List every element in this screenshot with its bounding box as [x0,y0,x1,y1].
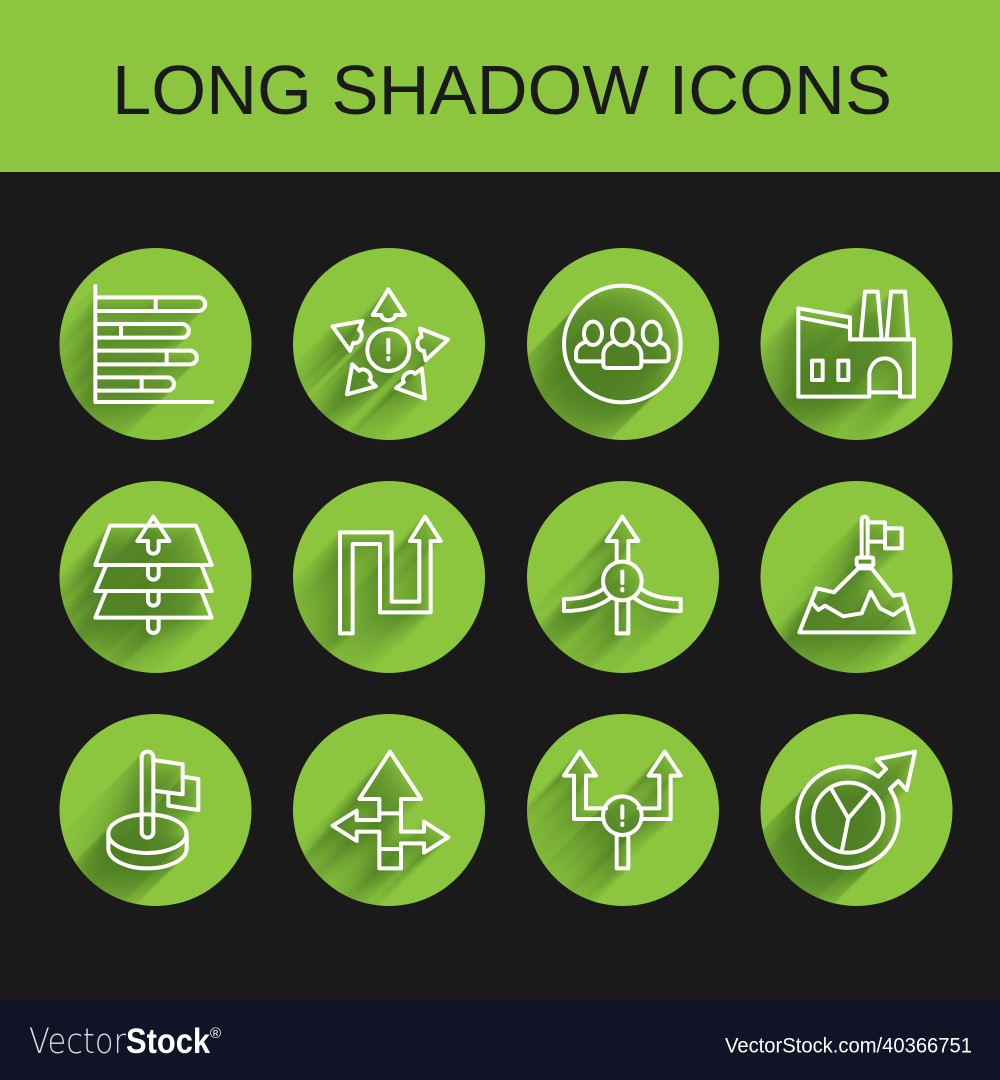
icon: group of people in circle [527,248,719,440]
header banner [0,0,1000,172]
icon: winding path arrow [293,481,485,673]
icon: layers with up arrow [60,481,252,673]
footer bar [0,1000,1000,1080]
footer logo: Stock [126,1022,210,1061]
icon: mountain with flag [760,481,952,673]
icon: flag on round base [60,714,252,906]
icon: pie chart with growth arrow [760,714,952,906]
icon: three-way arrows [293,714,485,906]
icon: horizontal bar chart [60,248,252,440]
icon: road junction with exclamation [527,481,719,673]
icon: factory [760,248,952,440]
icon: forked arrows with exclamation [527,714,719,906]
title: LONG SHADOW ICONS [112,51,892,129]
footer image id: VectorStock.com/40366751 [725,1034,972,1058]
icon: five arrows around exclamation [293,248,485,440]
footer logo: ® [210,1025,221,1042]
footer logo: Vector [29,1022,127,1062]
